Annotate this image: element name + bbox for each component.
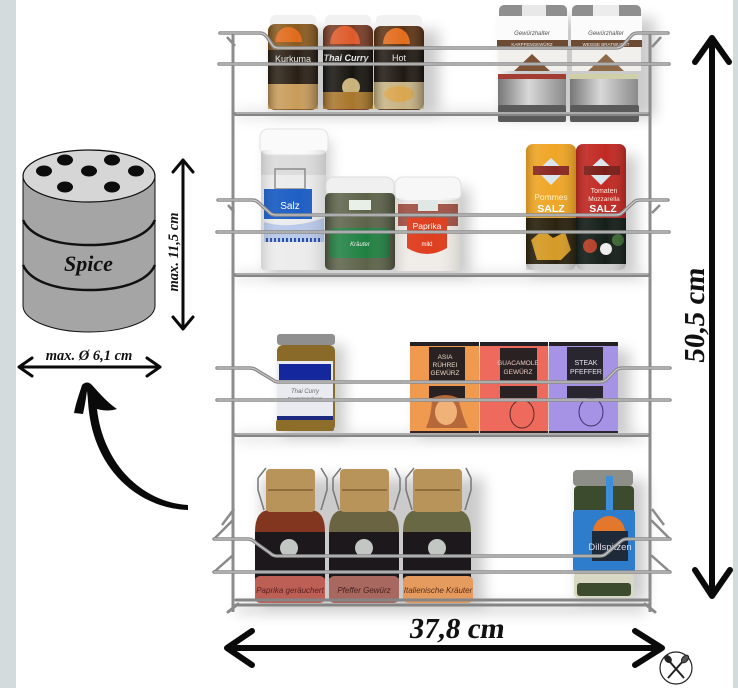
cylinder top with holes bbox=[23, 150, 155, 202]
cork jar: Italienische Kräuter: Italienische Kräuter bbox=[404, 586, 473, 595]
rack tier 3 rails bbox=[217, 368, 670, 435]
height arrow of container bbox=[173, 160, 193, 329]
cork jar: Pfeffer Gewürz bbox=[329, 468, 400, 603]
cork jar: Pfeffer Gewürz: Pfeffer Gewürz bbox=[337, 586, 391, 595]
spice tin left: Gewürzhalter bbox=[514, 31, 551, 37]
spice jar: Thai Curry Gewürzmischung: Gewürzmischung bbox=[288, 396, 323, 401]
spice jar: Dillspitzen bbox=[573, 470, 635, 598]
spice jar: Thai Curry Gewürzmischung bbox=[276, 334, 335, 431]
total width label: 37,8 cm bbox=[408, 613, 507, 645]
spice can: Guacamole Gewürz bbox=[480, 342, 548, 434]
spice shaker: Paprika: Paprika bbox=[413, 221, 442, 231]
shelf 3 spices bbox=[276, 334, 618, 434]
total width arrow bbox=[227, 631, 662, 665]
cork jar: Italienische Kräuter bbox=[403, 468, 473, 603]
spice jar: green herbs bbox=[325, 177, 395, 270]
total height arrow bbox=[695, 38, 730, 596]
cork jar: Paprika geräuchert bbox=[255, 468, 327, 603]
curved arrow to container bbox=[74, 382, 188, 510]
spice tin right: Gewürzhalter bbox=[588, 31, 625, 37]
spice can: Tomaten Mozzarella Salz: SALZ bbox=[589, 203, 617, 215]
spice jar: Thai Curry: Thai Curry bbox=[323, 53, 369, 63]
icon: crossed utensils logo bbox=[660, 652, 692, 684]
spice jar: Thai Curry bbox=[323, 15, 373, 110]
spice jar: Kurkuma: Kurkuma bbox=[275, 54, 311, 64]
spice can: Tomaten Mozzarella Salz: Tomaten bbox=[591, 188, 618, 195]
spice jar: Kurkuma bbox=[268, 15, 318, 110]
spice can: Guacamole Gewürz: GUACAMOLE bbox=[497, 360, 539, 367]
spice can: Asia Ruhrei Gewürz: GEWÜRZ bbox=[431, 369, 459, 377]
spice can: Tomaten Mozzarella Salz: Mozzarella bbox=[588, 196, 620, 203]
spice jar: Dillspitzen: Dillspitzen bbox=[588, 542, 632, 553]
spice can: Steak Pfeffer: PFEFFER bbox=[570, 369, 602, 376]
shelf 2 spices bbox=[260, 129, 626, 271]
rack tier 4 rails bbox=[214, 521, 670, 605]
shelf 4 spices bbox=[255, 468, 635, 603]
cylinder ring lower bbox=[23, 265, 155, 290]
spice container diagram bbox=[23, 150, 155, 332]
spice can: Steak Pfeffer bbox=[549, 342, 618, 434]
spice can: Steak Pfeffer: STEAK bbox=[575, 360, 598, 367]
rack tier 2 rails bbox=[217, 200, 669, 275]
rack tier 1 rails bbox=[219, 33, 669, 114]
spice shaker: Paprika: mild bbox=[421, 242, 433, 248]
spice shaker: Salz bbox=[260, 129, 328, 270]
diameter arrow bbox=[19, 358, 160, 376]
spice jar: green herbs: Kräuter bbox=[350, 242, 371, 248]
rack back frame bbox=[222, 33, 664, 612]
spice can: Asia Ruhrei Gewürz: ASIA bbox=[438, 354, 453, 361]
spice tin left bbox=[497, 5, 568, 122]
spice shaker: Paprika bbox=[395, 177, 461, 271]
spice tin right bbox=[570, 5, 642, 122]
cylinder body bbox=[23, 176, 155, 332]
shelf 1 spices bbox=[268, 5, 642, 122]
spice can: Pommes Salz: SALZ bbox=[537, 203, 565, 215]
spice shaker: Salz: Salz bbox=[280, 201, 300, 212]
spice jar: Thai Curry Gewürzmischung: Thai Curry bbox=[291, 389, 320, 395]
spice can: Guacamole Gewürz: GEWÜRZ bbox=[504, 368, 532, 376]
cork jar: Paprika geräuchert: Paprika geräuchert bbox=[256, 586, 325, 595]
spice jar: Hot: Hot bbox=[392, 53, 406, 63]
spice can: Pommes Salz: Pommes bbox=[534, 192, 568, 202]
spice tin right: WEISSE BRATWURST bbox=[583, 42, 630, 47]
spice can: Asia Ruhrei Gewürz: RÜHREI bbox=[433, 361, 458, 369]
spice tin left: KARPFENGEWÜRZ bbox=[511, 41, 553, 47]
height label: max. 11,5 cm bbox=[166, 213, 182, 291]
label: Spice: Spice bbox=[64, 251, 113, 276]
spice can: Tomaten Mozzarella Salz bbox=[576, 144, 626, 270]
cylinder ring upper bbox=[23, 220, 155, 245]
diameter label: max. Ø 6,1 cm bbox=[46, 348, 132, 364]
spice can: Asia Ruhrei Gewürz bbox=[410, 342, 479, 434]
spice jar: Hot bbox=[374, 15, 424, 110]
soft wall shadows bbox=[236, 18, 655, 613]
spice can: Pommes Salz bbox=[526, 144, 576, 270]
total height label: 50,5 cm bbox=[679, 266, 711, 364]
rack wire rails and shelves bbox=[214, 33, 670, 612]
